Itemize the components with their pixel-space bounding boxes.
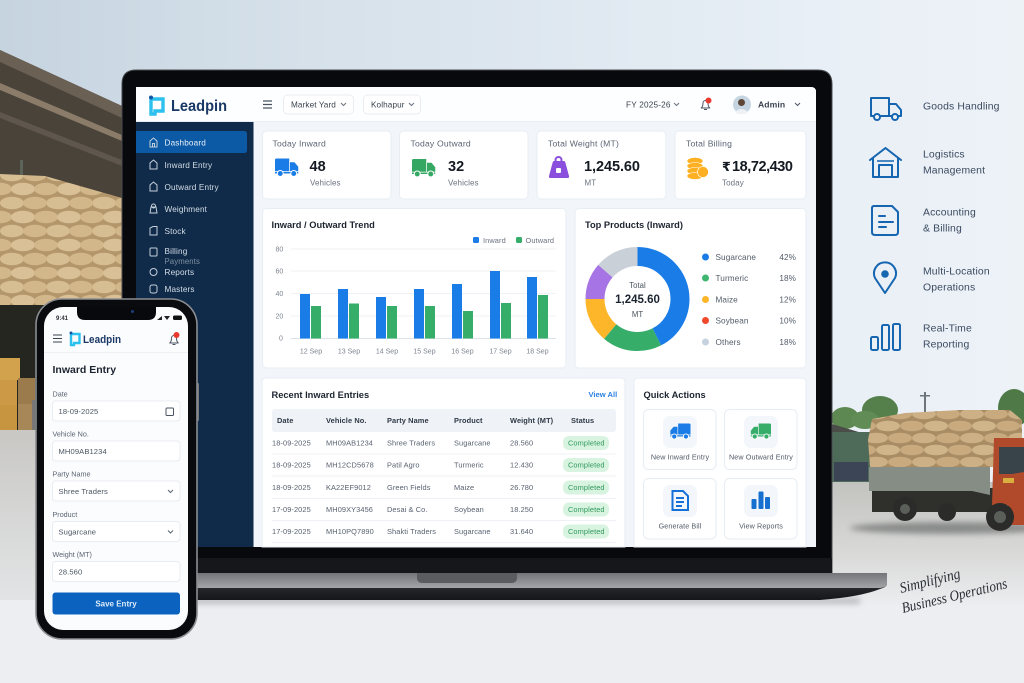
legend: Sugarcane — [716, 253, 756, 262]
feature: accounting — [872, 206, 976, 235]
feature: logistics: Management — [923, 166, 985, 176]
action: new outward — [724, 410, 797, 470]
sidebar: Inward Entry — [164, 161, 213, 170]
table header: Party Name — [387, 416, 429, 425]
recent entries table panel: Green Fields — [387, 483, 431, 492]
x labels: 17 Sep — [489, 348, 512, 356]
recent entries table panel — [262, 378, 625, 547]
base — [80, 573, 887, 600]
filter: market yard: Market Yard — [291, 100, 336, 110]
tagline: Business Operations — [900, 576, 1009, 617]
quick actions panel — [634, 378, 806, 547]
wheels — [893, 497, 917, 521]
table header: Status — [571, 416, 594, 425]
shed — [832, 424, 872, 440]
top bar — [136, 87, 816, 122]
table header: Date — [277, 416, 293, 425]
feature: multi-location: Operations — [923, 282, 975, 294]
top products panel — [575, 208, 806, 368]
kpi: total billing: 18,72,430 — [732, 159, 793, 175]
laptop shadow — [120, 598, 860, 604]
form: date: 18-09-2025 — [58, 407, 98, 416]
recent entries table panel: 31.640 — [510, 527, 533, 536]
recent entries table panel: MH09XY3456 — [326, 505, 373, 514]
axis: 80 — [276, 246, 283, 254]
chassis — [872, 488, 997, 512]
phone title: Inward Entry — [52, 364, 116, 376]
action: generate bill — [644, 478, 716, 539]
logo: Leadpin — [171, 98, 227, 115]
sidebar: Payments — [164, 257, 200, 266]
form: party: Shree Traders — [58, 487, 108, 496]
cargo sacks — [868, 410, 1022, 467]
feature: goods handling — [871, 98, 1000, 120]
save button: Save Entry — [95, 600, 137, 608]
table header: Vehicle No. — [326, 416, 367, 425]
kpi: total weight: Total Weight (MT) — [548, 138, 619, 148]
status bar — [56, 316, 182, 322]
sidebar: Outward Entry — [164, 183, 220, 192]
admin avatar — [733, 96, 800, 114]
form: vehicle: Vehicle No. — [52, 430, 89, 438]
x labels: 14 Sep — [376, 348, 398, 356]
rows: 28.560 — [510, 438, 533, 448]
status bar: 9:41 — [56, 316, 69, 322]
axis: 0 — [279, 336, 283, 342]
legend — [702, 253, 796, 347]
screen — [136, 87, 816, 547]
recent entries table panel: 18-09-2025 — [272, 460, 311, 470]
recent entries table panel: KA22EF9012 — [326, 483, 371, 492]
action: new inward: New Inward Entry — [651, 452, 709, 462]
form: product — [52, 510, 180, 542]
form: product: Sugarcane — [58, 528, 96, 536]
logo — [149, 96, 227, 115]
rows: Completed — [568, 438, 605, 448]
feature: logistics: Logistics — [923, 150, 965, 160]
phone screen — [44, 307, 188, 630]
legend: 12% — [779, 296, 796, 304]
laptop — [80, 70, 887, 604]
icon: coins — [687, 158, 708, 180]
cargo bed — [869, 467, 990, 495]
icon: weight — [549, 157, 569, 178]
warehouse shed — [0, 50, 122, 430]
sidebar: Dashboard — [164, 138, 206, 148]
recent entries table panel: Maize — [454, 483, 474, 492]
recent entries table panel: Soybean — [454, 505, 484, 514]
trees — [862, 396, 898, 424]
form: vehicle: MH09AB1234 — [58, 447, 107, 456]
recent entries table panel: 26.780 — [510, 483, 533, 492]
kpi: today inward: Vehicles — [310, 178, 341, 188]
kpi: today outward: Today Outward — [410, 138, 471, 148]
feature: accounting: Accounting — [923, 208, 976, 218]
background: truck scene — [831, 389, 1024, 534]
feature: reporting: Reporting — [923, 340, 969, 350]
recent entries table panel: Desai & Co. — [387, 505, 428, 514]
shadow — [850, 522, 1024, 534]
legend: Maize — [716, 296, 738, 304]
quick actions panel: Quick Actions — [644, 390, 706, 400]
kpi: today inward: Today Inward — [272, 138, 326, 148]
kpi: today outward: Vehicles — [448, 178, 479, 188]
recent entries table panel: Completed — [568, 527, 605, 536]
legend: 10% — [779, 316, 796, 326]
x labels: 18 Sep — [526, 348, 549, 356]
action: generate bill: Generate Bill — [659, 522, 702, 530]
fiscal year: FY 2025-26 — [626, 100, 671, 110]
table header: Product — [454, 416, 483, 425]
x labels: 13 Sep — [338, 348, 360, 356]
sidebar: Reports — [164, 268, 194, 277]
kpi: total weight: 1,245.60 — [584, 159, 640, 175]
legend: 18% — [779, 274, 796, 283]
sidebar — [136, 122, 254, 547]
action: view reports — [724, 478, 797, 539]
recent entries table panel: Recent Inward Entries — [272, 390, 369, 400]
kpi: total weight: MT — [584, 178, 596, 188]
table header — [272, 409, 616, 432]
recent entries table panel: 18.250 — [510, 505, 533, 514]
x labels — [300, 348, 549, 356]
tagline: Simplifying — [898, 566, 963, 597]
menu icon — [263, 101, 272, 108]
rows: Shree Traders — [387, 438, 435, 448]
recent entries table panel: MH10PQ7890 — [326, 527, 374, 536]
axis: 40 — [276, 291, 283, 298]
form: party: Party Name — [52, 470, 90, 478]
rows — [272, 436, 609, 450]
x labels: 12 Sep — [300, 348, 322, 356]
feature: multi-location — [874, 262, 990, 294]
legend: Outward — [526, 236, 554, 245]
admin avatar: Admin — [758, 100, 785, 110]
feature: accounting: & Billing — [923, 224, 962, 234]
phone — [32, 299, 199, 639]
hinge notch — [417, 573, 517, 583]
kpi: total billing: Total Billing — [686, 138, 732, 148]
floor — [0, 430, 130, 683]
cab — [992, 438, 1024, 525]
save button — [52, 592, 180, 614]
kpi: today outward — [400, 131, 528, 199]
legend: Inward — [483, 236, 506, 245]
trend chart panel — [262, 208, 566, 368]
filter: kolhapur — [364, 95, 420, 114]
recent entries table panel: Sugarcane — [454, 527, 491, 536]
form: vehicle — [52, 430, 180, 461]
kpi: total billing — [675, 131, 806, 199]
feature: logistics — [870, 148, 985, 177]
recent entries table panel: Patil Agro — [387, 460, 420, 470]
recent entries table panel: 18-09-2025 — [272, 483, 311, 492]
active item — [136, 131, 247, 153]
recent entries table panel: Completed — [568, 505, 605, 514]
recent entries table panel: Completed — [568, 483, 605, 492]
trend chart panel: Inward / Outward Trend — [272, 220, 375, 230]
table header: Weight (MT) — [510, 416, 554, 425]
recent entries table panel: View All — [588, 390, 617, 399]
kpi: total billing: Today — [722, 178, 744, 188]
notch — [77, 307, 156, 320]
form: product: Product — [52, 510, 77, 519]
sidebar: Billing — [164, 247, 188, 256]
feature: reporting: Real-Time — [923, 324, 972, 334]
recent entries table panel: MH12CD5678 — [326, 460, 374, 470]
axis — [276, 246, 556, 342]
kpi: today inward — [262, 131, 391, 199]
action: new outward: New Outward Entry — [729, 452, 793, 462]
legend: 18% — [779, 338, 796, 347]
form: weight — [52, 550, 180, 582]
feature: reporting — [871, 324, 972, 350]
axis: 20 — [276, 314, 283, 320]
lid — [122, 70, 832, 574]
sidebar: Masters — [164, 285, 195, 294]
legend — [473, 236, 554, 245]
feature: multi-location: Multi-Location — [923, 266, 990, 278]
donut center: 1,245.60 — [615, 294, 660, 306]
stacked cartons — [0, 358, 35, 430]
action: new inward — [644, 410, 716, 470]
row lines — [272, 454, 616, 542]
rows: MH09AB1234 — [326, 438, 373, 448]
phone header: Leadpin — [83, 334, 121, 346]
form: party — [52, 470, 180, 501]
form: date: Date — [52, 390, 68, 398]
rows: 18-09-2025 — [272, 438, 311, 448]
bell — [701, 98, 712, 110]
action: view reports: View Reports — [739, 522, 783, 530]
feature: goods handling: Goods Handling — [923, 102, 1000, 112]
rows: Sugarcane — [454, 438, 491, 448]
kpi: today outward: 32 — [448, 159, 464, 175]
kpi: today inward: 48 — [310, 159, 326, 175]
kpi: total weight — [537, 131, 666, 199]
outward bars — [311, 295, 548, 338]
legend: Others — [716, 338, 741, 347]
stacked sacks — [0, 174, 122, 305]
recent entries table panel: Shakti Traders — [387, 527, 436, 536]
filter: kolhapur: Kolhapur — [371, 100, 405, 110]
form: weight: Weight (MT) — [52, 550, 92, 559]
form: weight: 28.560 — [58, 568, 82, 576]
donut chart — [595, 256, 680, 342]
phone header — [44, 332, 188, 353]
axis: 60 — [276, 268, 283, 276]
donut center: MT — [632, 310, 643, 319]
legend: Turmeric — [716, 274, 748, 283]
sidebar: Stock — [164, 227, 186, 236]
recent entries table panel: Turmeric — [454, 460, 484, 470]
inward bars — [300, 271, 537, 338]
legend: 42% — [779, 253, 796, 262]
x labels: 15 Sep — [413, 348, 436, 356]
form: date — [52, 390, 180, 421]
recent entries table panel: Completed — [568, 460, 605, 470]
donut center: Total — [629, 281, 646, 290]
sidebar: Weighment — [164, 205, 208, 214]
recent entries table panel: 17-09-2025 — [272, 527, 311, 536]
filter: market yard — [284, 95, 354, 114]
top products panel: Top Products (Inward) — [585, 220, 683, 230]
donut center — [615, 281, 660, 319]
legend: Soybean — [716, 316, 749, 326]
recent entries table panel: 17-09-2025 — [272, 505, 311, 514]
x labels: 16 Sep — [451, 348, 474, 356]
recent entries table panel: 12.430 — [510, 460, 533, 470]
kpi: total billing: ₹ — [722, 159, 731, 174]
